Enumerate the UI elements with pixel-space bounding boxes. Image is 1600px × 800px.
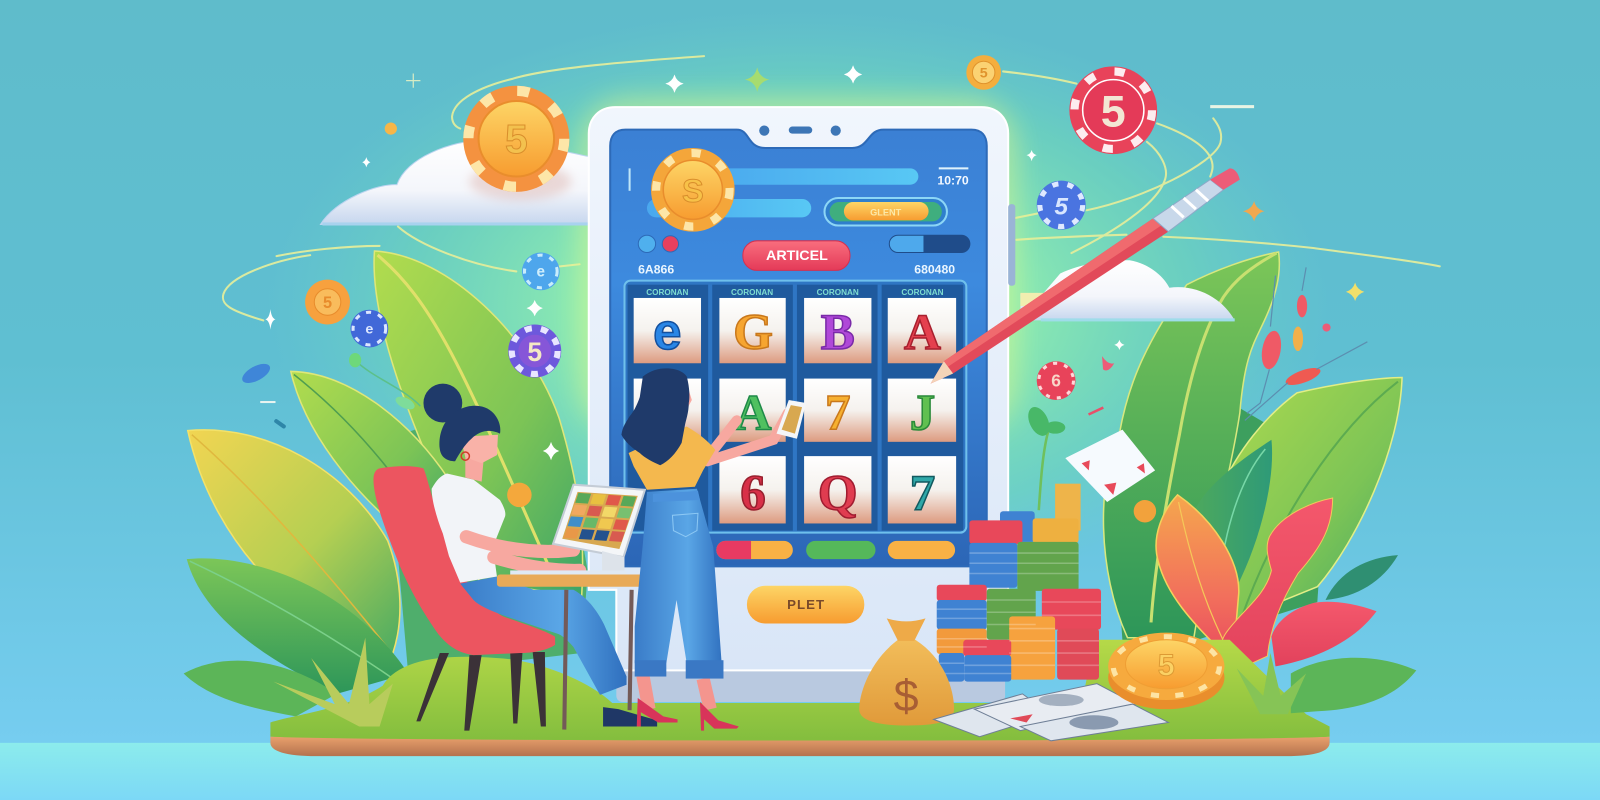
swirl lines [223, 56, 1440, 320]
sparkle: orange [1243, 201, 1264, 221]
cloud: right [1020, 260, 1235, 321]
column headers: CORONAN [901, 288, 944, 297]
table [497, 574, 653, 730]
leaf: tall green right [1103, 252, 1279, 638]
reel symbols: e [653, 303, 682, 360]
belt and pocket [653, 491, 700, 502]
leaf backing [388, 408, 588, 673]
chip: purple [508, 324, 561, 378]
chip stacks [937, 484, 1101, 682]
chip: large gold top left [463, 86, 569, 192]
reel symbols: 6 [740, 466, 766, 522]
reel symbols: A [904, 305, 941, 361]
sparkle: top green [745, 67, 769, 92]
yellow shirt [629, 427, 715, 490]
banknotes [934, 684, 1168, 741]
sparkle: left thin [406, 73, 420, 88]
reel symbols: G [733, 305, 773, 361]
sparkle: tiny left [362, 157, 370, 167]
score left: 6A866 [638, 262, 674, 276]
desktop screen [553, 485, 645, 573]
reel symbols: B [821, 305, 855, 361]
seedling and buds [1024, 267, 1367, 510]
head and bun [423, 384, 500, 482]
cuffs [635, 660, 666, 677]
green pill button: GLENT [870, 207, 902, 217]
article button: ARTICEL [766, 248, 828, 264]
chip: small red right: 6 [1051, 371, 1061, 391]
red chair [373, 466, 555, 731]
big gold coin: 5 [1158, 649, 1175, 683]
shoe [603, 707, 657, 727]
hair [621, 368, 689, 465]
play button [747, 586, 864, 623]
handheld phone [777, 400, 806, 439]
flat blue token [239, 360, 273, 387]
orb: right [1134, 500, 1156, 522]
leaf: orange red [1156, 495, 1239, 663]
leaf: yellow [188, 430, 400, 653]
phone body [616, 653, 1005, 702]
toggle [889, 235, 970, 253]
cloud: left [320, 140, 592, 226]
leaf: small dark [1326, 555, 1398, 600]
sparkle: yellow [1346, 283, 1364, 301]
platform base [270, 737, 1330, 756]
stacks front row [937, 585, 1101, 682]
indicator dots [638, 235, 679, 253]
chip: gold on screen: S [682, 172, 704, 209]
standing woman [621, 368, 806, 731]
big gold coin [1108, 633, 1224, 709]
sparkle: white cloud below [1114, 340, 1124, 350]
time label: 10:70 [937, 174, 969, 188]
leaves: left cluster [184, 251, 588, 716]
leaf: ground [184, 661, 337, 716]
leaf backing right [1112, 408, 1327, 641]
chip: red top right [1069, 66, 1157, 154]
column headers: CORONAN [817, 288, 859, 297]
play button: PLET [787, 597, 825, 612]
phone glow [594, 112, 1002, 418]
orb: top left [385, 122, 397, 135]
grass platform [270, 640, 1416, 756]
leaf: ground right [1291, 658, 1416, 713]
chip: large gold top left: 5 [505, 116, 528, 162]
sparkle: white top right [844, 65, 862, 84]
column headers [646, 288, 944, 297]
article button [743, 241, 850, 270]
sparkle: white leaf [527, 300, 543, 316]
chip: blue right: 5 [1054, 193, 1068, 220]
column headers: CORONAN [731, 288, 773, 297]
orb: near seated woman [507, 483, 532, 507]
chip: small red right [1037, 361, 1076, 400]
chip: small gold top [966, 55, 1001, 90]
leaves: right cluster [1103, 252, 1402, 673]
sparkle: leaf lower [543, 442, 559, 460]
sparkle: white top [665, 74, 684, 93]
reel symbols [653, 303, 941, 522]
seated woman at desk [373, 384, 657, 731]
time label [937, 167, 969, 188]
score right: 680480 [914, 262, 955, 276]
chip: light blue: e [537, 264, 545, 281]
reel symbols: Q [818, 466, 858, 522]
leaf: tall green [374, 251, 583, 597]
green bud and stem [349, 353, 420, 412]
chip: purple: 5 [527, 337, 542, 367]
jeans [460, 577, 627, 695]
chip: light blue [522, 253, 560, 290]
money bag: $ [894, 670, 919, 721]
reel symbols: 7 [910, 466, 935, 522]
leaf: red flat [1271, 602, 1377, 666]
phone screen [610, 130, 987, 566]
chip: orange left [305, 280, 350, 324]
slot grid [624, 281, 966, 533]
reel symbols: J [910, 386, 935, 442]
legs and heels [637, 676, 739, 731]
column headers: CORONAN [646, 288, 689, 297]
stacks back row [969, 484, 1081, 591]
arms [466, 537, 580, 570]
arm [707, 413, 788, 461]
reel symbols: A [735, 386, 772, 442]
pencil [931, 168, 1240, 384]
foliage tufts [273, 638, 1306, 727]
face [668, 384, 692, 427]
dash [1210, 105, 1254, 108]
white shirt [432, 473, 505, 583]
small dashes [260, 401, 1104, 429]
jeans [635, 489, 723, 679]
leaf: teal [1191, 440, 1272, 587]
money bag [859, 618, 954, 726]
chip: small gold top: 5 [980, 66, 988, 82]
chip: gold on screen [651, 148, 735, 232]
chip: blue left: e [365, 322, 373, 338]
control bars [716, 541, 955, 559]
sparkle: white phone side [1027, 150, 1037, 161]
phone device [589, 107, 1015, 702]
sparkles [260, 65, 1364, 522]
keyboard [510, 570, 627, 577]
sparkle: white left [265, 309, 276, 330]
reel cells [634, 298, 956, 523]
green pill button [824, 198, 947, 226]
chip: red top right: 5 [1101, 86, 1126, 137]
leaf: red curved [1221, 498, 1333, 673]
chip: blue left [351, 310, 388, 347]
phone camera dots [759, 126, 841, 136]
leaf: mid green [291, 371, 449, 551]
chip ridges [937, 553, 1101, 673]
leaf: lower dark green [187, 558, 408, 694]
mini slot tiles [564, 493, 636, 542]
leaf: wide right [1200, 378, 1402, 633]
reel symbols: 7 [825, 386, 851, 442]
chip: orange left: 5 [323, 294, 332, 312]
playing card [1065, 430, 1155, 502]
chip: blue right [1037, 181, 1086, 230]
top input bars [629, 168, 918, 217]
